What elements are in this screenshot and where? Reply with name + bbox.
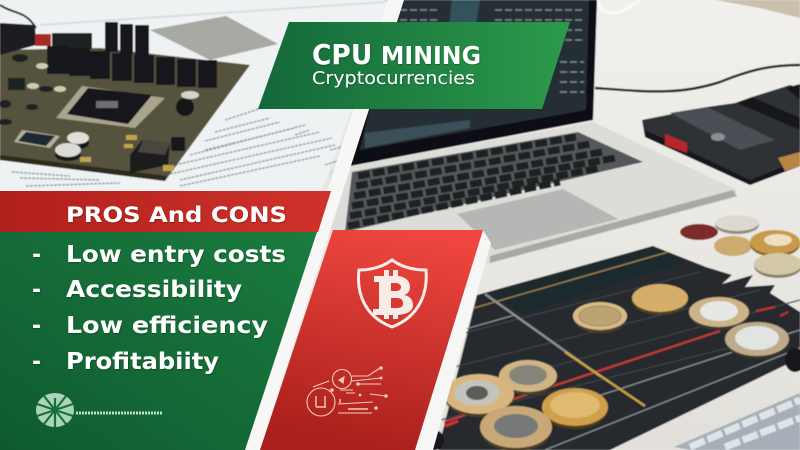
photo: desk with laptop, device and coins [330, 0, 800, 450]
silver keypad [674, 393, 800, 450]
chart mat [424, 246, 800, 450]
cable [595, 65, 800, 91]
list of points: - [32, 313, 41, 339]
photo: circuit board on printed paper [0, 0, 392, 191]
small coins top right [680, 215, 800, 278]
icon: green circuit emblem [36, 393, 163, 427]
icon: coins and circuit lines [307, 366, 388, 416]
laptop [330, 0, 737, 263]
list of points: - [32, 349, 41, 375]
device [642, 84, 800, 185]
list of points: Low entry costs [66, 242, 286, 268]
list of points: Accessibility [66, 277, 242, 303]
list of points [32, 242, 286, 375]
pros and cons heading bar [0, 191, 331, 232]
list of points: - [32, 277, 41, 303]
panel: title banner [258, 22, 570, 109]
list of points: Low efficiency [66, 313, 268, 339]
green list panel [0, 232, 317, 450]
list of points: - [32, 242, 41, 268]
panel: red bitcoin panel [260, 230, 491, 450]
subtitle: Cryptocurrencies [312, 68, 475, 89]
coins on mat [444, 284, 789, 450]
keyboard [345, 132, 643, 232]
touchpad [457, 189, 618, 250]
icon: bitcoin shield [358, 260, 426, 327]
list of points: Profitabiity [66, 349, 219, 375]
panel: pros and cons [0, 191, 331, 450]
white diagonal divider [245, 0, 404, 450]
title: CPU MINING [312, 38, 481, 71]
pros and cons heading bar: PROS And CONS [66, 203, 287, 228]
